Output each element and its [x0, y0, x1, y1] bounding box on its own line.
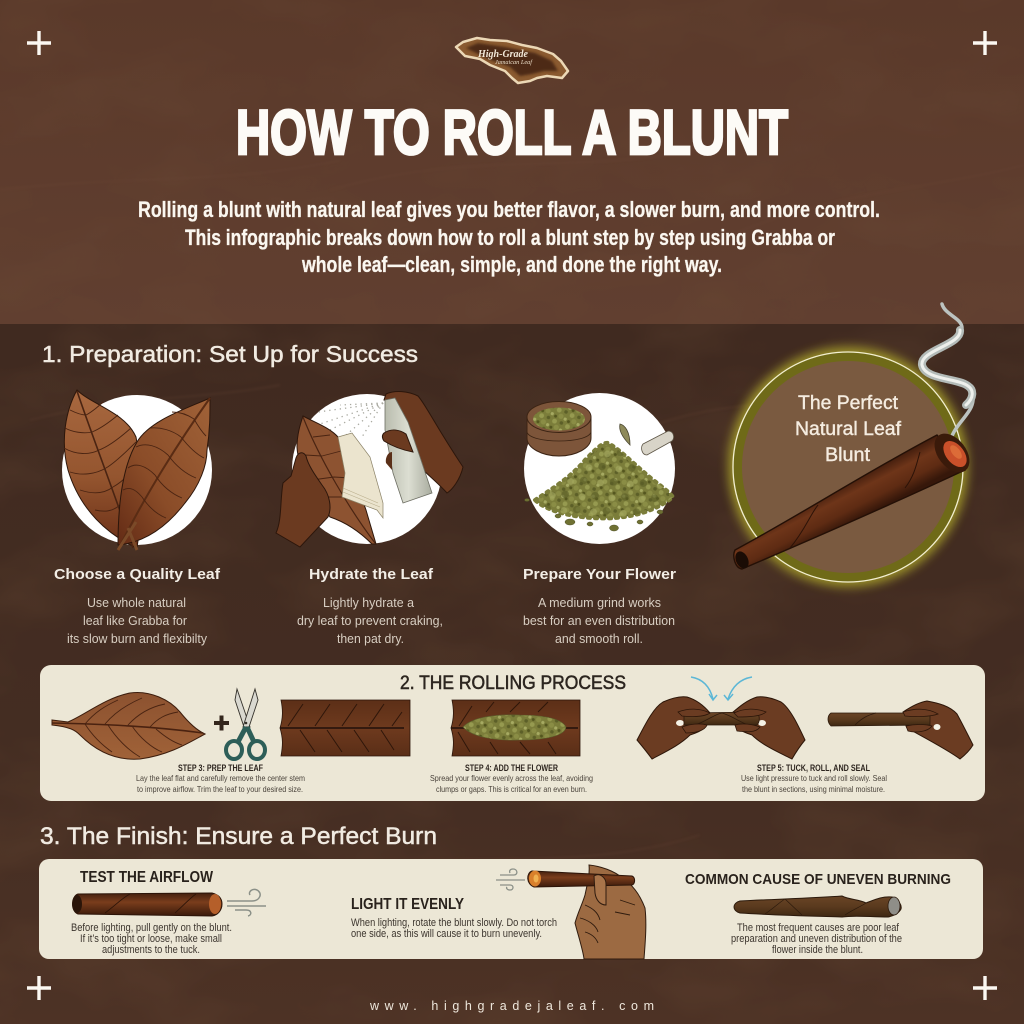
- text: airflow description: adjustments to the tuck.: [102, 944, 200, 956]
- text: step 5: Use light pressure to tuck and roll slowly. Seal: [741, 773, 887, 783]
- panel: prepare your flower: [523, 393, 676, 646]
- icon: unlit blunt: [72, 893, 222, 916]
- logo: Jamaica island shape: High-Grade: [477, 48, 528, 60]
- text: step 5: STEP 5: TUCK, ROLL, AND SEAL: [757, 763, 871, 773]
- logo: Jamaica island shape: [456, 38, 568, 83]
- callout: the perfect natural leaf blunt: [728, 304, 977, 587]
- text: airflow description: [71, 922, 232, 956]
- text: flower description: best for an even distribution: [523, 613, 675, 628]
- text: leaf description: its slow burn and flexibilty: [67, 631, 207, 646]
- heading 2: 2. THE ROLLING PROCESS: [400, 672, 626, 694]
- text: step 5: the blunt in sections, using minimal moisture.: [742, 784, 885, 794]
- text: step 3: to improve airflow. Trim the leaf to your desired size.: [137, 784, 303, 794]
- text: cause description: preparation and uneven distribution of the: [731, 933, 902, 945]
- block: test the airflow: [71, 869, 266, 956]
- text: hydrate description: dry leaf to prevent craking,: [297, 613, 443, 628]
- panel: hydrate the leaf: [276, 392, 463, 646]
- corner plus: bottom right: [973, 976, 997, 1000]
- icon: blunt held in one hand: [828, 701, 973, 759]
- text: cause description: [731, 922, 902, 956]
- text: step 3: Lay the leaf flat and carefully remove the center stem: [136, 773, 305, 783]
- icon: hands spraying a leaf with a towel: [276, 392, 463, 547]
- text: flower description: [523, 595, 675, 646]
- text: badge label: The Perfect: [798, 393, 899, 414]
- text: flower description: and smooth roll.: [555, 631, 643, 646]
- corner plus: top right: [973, 31, 997, 55]
- text: badge label: [795, 393, 902, 466]
- icon: hand holding lit blunt: [528, 865, 646, 959]
- corner plus: bottom left: [27, 976, 51, 1000]
- label: hydrate the leaf: Hydrate the Leaf: [309, 567, 433, 583]
- section heading 3: 3. The Finish: Ensure a Perfect Burn: [40, 823, 437, 850]
- text: light description: When lighting, rotate the blunt slowly. Do not torch: [351, 917, 557, 929]
- icon: leaf with flower: [451, 700, 580, 756]
- text: step 3: STEP 3: PREP THE LEAF: [178, 763, 264, 773]
- icon: wind: [496, 869, 525, 890]
- section heading 1: 1. Preparation: Set Up for Success: [42, 341, 418, 367]
- corner plus: top left: [27, 31, 51, 55]
- block: light it evenly: [351, 865, 646, 959]
- background: lower band: [0, 324, 1024, 1024]
- text: airflow description: Before lighting, pull gently on the blunt.: [71, 922, 232, 934]
- block: common cause of uneven burning: [685, 871, 951, 956]
- arrow: right curved blue: [724, 677, 752, 700]
- block: light it evenly: LIGHT IT EVENLY: [351, 896, 465, 913]
- text: hydrate description: Lightly hydrate a: [323, 595, 415, 610]
- text: step 3: [136, 763, 305, 794]
- text: leaf description: Use whole natural: [87, 595, 186, 610]
- label: prepare your flower: Prepare Your Flower: [523, 567, 676, 583]
- intro paragraph: whole leaf—clean, simple, and done the right way.: [301, 252, 722, 277]
- text: step 4: [430, 763, 593, 794]
- label: choose a quality leaf: Choose a Quality Leaf: [54, 567, 220, 583]
- text: light description: [351, 917, 557, 940]
- icon: trimmed leaf: [280, 700, 410, 756]
- title: HOW TO ROLL A BLUNT: [236, 98, 788, 168]
- arrow: left curved blue: [691, 677, 717, 700]
- text: step 4: STEP 4: ADD THE FLOWER: [465, 763, 559, 773]
- footer website: www. highgradejaleaf. com: [369, 999, 654, 1013]
- intro paragraph: This infographic breaks down how to roll a blunt step by step using Grabba or: [185, 225, 835, 250]
- badge: glowing circle: [728, 347, 968, 587]
- text: hydrate description: then pat dry.: [337, 631, 404, 646]
- text: flower description: A medium grind works: [538, 595, 661, 610]
- icon: uneven blunt: [734, 896, 901, 917]
- background: upper band: [0, 0, 1024, 324]
- icon: large blunt: [733, 427, 977, 571]
- text: airflow description: If it’s too tight or loose, make small: [80, 933, 222, 945]
- icon: flat leaf: [52, 692, 205, 759]
- icon: plus: [214, 716, 229, 730]
- intro paragraph: [138, 197, 880, 277]
- text: cause description: flower inside the blunt.: [772, 944, 863, 956]
- logo: Jamaica island shape: Jamaican Leaf: [495, 59, 533, 66]
- icon: grinder, ground flower pile and rolled leaf: [524, 393, 675, 544]
- text: step 5: [741, 763, 887, 794]
- text: cause description: The most frequent causes are poor leaf: [737, 922, 900, 934]
- text: light description: one side, as this will cause it to burn unevenly.: [351, 928, 542, 940]
- block: test the airflow: TEST THE AIRFLOW: [80, 869, 213, 886]
- text: hydrate description: [297, 595, 443, 646]
- icon: two hands pinching a blunt: [637, 697, 805, 759]
- icon: wind: [227, 889, 266, 916]
- text: step 4: clumps or gaps. This is critical for an even burn.: [436, 784, 587, 794]
- panel: the rolling process: [40, 665, 985, 801]
- text: step 4: Spread your flower evenly across the leaf, avoiding: [430, 773, 593, 783]
- text: leaf description: [67, 595, 207, 646]
- panel: the finish: [39, 859, 983, 959]
- icon: smoke: [922, 304, 973, 436]
- text: badge label: Blunt: [825, 445, 871, 466]
- text: badge label: Natural Leaf: [795, 419, 902, 440]
- icon: scissors: [226, 689, 265, 759]
- block: common cause of uneven burning: COMMON CAUSE OF UNEVEN BURNING: [685, 871, 951, 888]
- icon: white circle with two tobacco leaves: [62, 390, 212, 550]
- text: leaf description: leaf like Grabba for: [83, 613, 188, 628]
- panel: choose a quality leaf: [54, 390, 220, 646]
